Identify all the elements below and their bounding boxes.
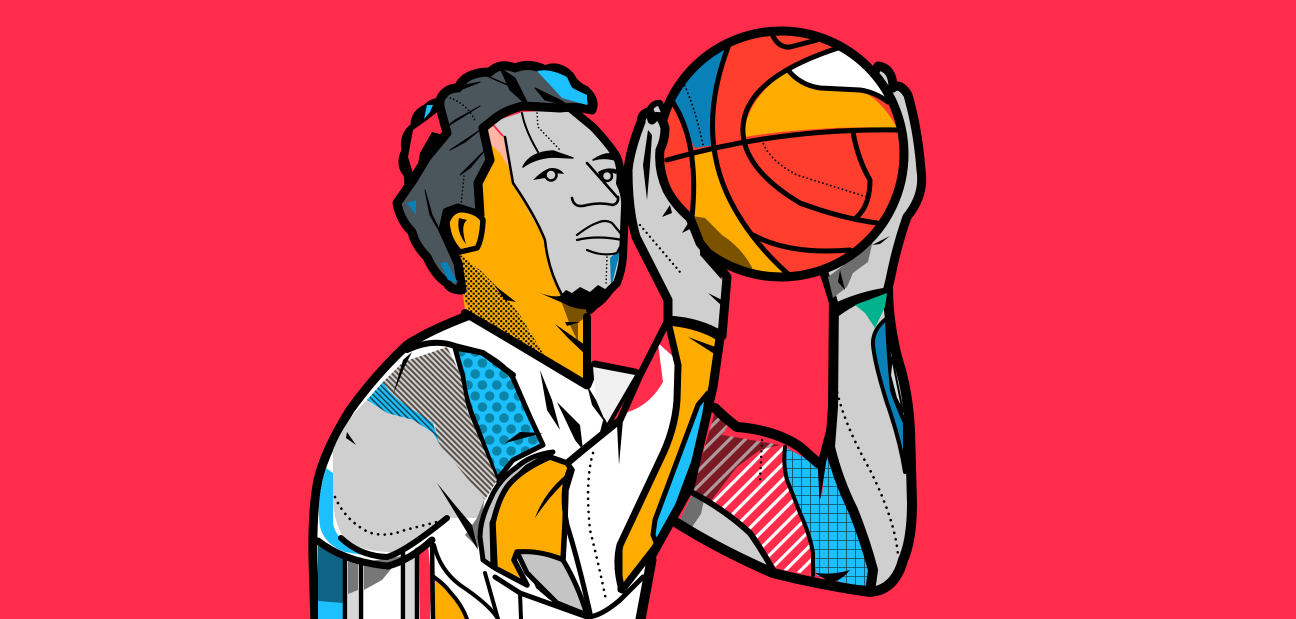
hand creases xyxy=(662,205,722,306)
face boundary line xyxy=(505,137,563,297)
blue dotted side panel xyxy=(455,348,543,480)
forearm blue stripe xyxy=(873,318,905,472)
blue forearm strip xyxy=(653,393,708,547)
basketball xyxy=(658,31,904,277)
upper arm blue grid xyxy=(785,447,873,590)
lips xyxy=(577,221,622,254)
lower fold line xyxy=(485,573,521,619)
face outline xyxy=(570,108,625,310)
armpit shadow xyxy=(465,500,484,548)
inner stitch xyxy=(588,453,606,600)
white under arm panel xyxy=(567,343,677,613)
forehead dotted stitch xyxy=(537,113,607,285)
jersey yellow hem xyxy=(435,577,467,619)
upper yellow panel xyxy=(744,71,897,137)
ear detail xyxy=(447,206,467,244)
yellow forearm sleeve xyxy=(618,322,720,590)
forehead lines xyxy=(522,112,592,152)
left stripe dark blue xyxy=(318,540,343,605)
hand dotted stitch xyxy=(640,225,680,272)
elbow shadow xyxy=(678,493,704,530)
neck shadow xyxy=(560,298,592,342)
hand shadow xyxy=(828,240,873,298)
stripe shadow xyxy=(348,556,402,594)
stripe lines xyxy=(345,540,433,619)
chest folds xyxy=(505,370,607,450)
left stripe blue xyxy=(318,601,343,619)
finger divider xyxy=(643,130,652,200)
shoulder creases xyxy=(346,352,478,550)
collar line xyxy=(465,313,587,385)
elbow yellow xyxy=(493,457,572,585)
face side blue xyxy=(610,248,621,288)
arm diagonal edge xyxy=(565,320,668,465)
grey shoulder xyxy=(333,400,485,552)
elbow wedge xyxy=(818,395,836,498)
jersey base xyxy=(313,315,652,619)
rear arm xyxy=(677,66,922,592)
hair dotted stitch xyxy=(443,96,476,205)
right hand xyxy=(823,66,922,308)
ball stitching xyxy=(683,82,867,197)
hair blue back xyxy=(407,200,458,283)
torso jersey xyxy=(313,315,652,619)
palm and fingers xyxy=(628,112,727,336)
elbow crease xyxy=(535,470,572,518)
ball seams xyxy=(667,34,897,274)
shooting arm xyxy=(480,320,720,619)
stripe light xyxy=(406,554,415,619)
hair blue top xyxy=(537,70,587,105)
upper arm mesh: stripes xyxy=(710,445,813,575)
neck creases xyxy=(494,285,586,355)
face xyxy=(492,110,625,307)
ball base xyxy=(658,31,904,277)
ball shadow xyxy=(692,216,755,274)
lower shoulder band xyxy=(318,540,432,566)
hair loop xyxy=(400,100,455,215)
right brow xyxy=(593,154,620,162)
nose xyxy=(572,163,618,206)
arm gap red xyxy=(628,350,663,410)
hatched shoulder xyxy=(367,347,497,500)
sleeve crease xyxy=(688,337,718,355)
blue hatched band xyxy=(367,382,440,445)
upper arm outline xyxy=(677,408,870,592)
neck and side of face xyxy=(458,130,590,383)
arm outer edge xyxy=(640,338,720,619)
forearm dotted stitch xyxy=(836,386,898,555)
strap edge xyxy=(407,343,513,375)
elbow ring xyxy=(480,452,553,567)
hem edge xyxy=(434,545,498,619)
stripe grey xyxy=(348,558,358,619)
shoulder lines xyxy=(341,518,447,557)
lower yellow panel xyxy=(690,147,786,276)
forearm xyxy=(830,288,912,592)
loop blue tip xyxy=(424,105,433,119)
curved inner line xyxy=(564,468,620,613)
palm creases xyxy=(834,236,890,318)
spike crease xyxy=(815,570,850,582)
right eye xyxy=(598,168,618,181)
wrist green patch xyxy=(855,293,887,328)
armpit dotted stitch xyxy=(760,440,762,480)
upper arm seam lines xyxy=(693,493,773,570)
hair strands xyxy=(425,68,570,250)
halftone neck shading xyxy=(458,253,547,360)
pinky tip xyxy=(648,103,664,125)
ear xyxy=(447,210,483,252)
upper arm shadow stripes xyxy=(692,412,780,502)
shoulder dotted stitch xyxy=(335,497,437,535)
left eye xyxy=(533,168,564,180)
inner elbow wedge xyxy=(517,552,587,615)
wedge crease xyxy=(530,572,550,600)
shoulder blue strip xyxy=(319,468,392,560)
jersey gap xyxy=(419,543,431,619)
white panel xyxy=(788,49,888,102)
forearm slit xyxy=(890,357,903,412)
left hand xyxy=(628,103,727,336)
loop gap xyxy=(408,110,448,180)
temple peach xyxy=(483,126,512,173)
beard xyxy=(533,285,617,309)
chest light panel xyxy=(593,367,635,423)
hair xyxy=(397,65,593,290)
white panel spike xyxy=(617,420,623,465)
lower grey triangle xyxy=(678,493,773,570)
left brow xyxy=(523,151,573,167)
lower jersey seam xyxy=(495,577,643,617)
head xyxy=(397,65,625,385)
blue panel xyxy=(668,42,730,148)
ball outline xyxy=(658,31,904,277)
